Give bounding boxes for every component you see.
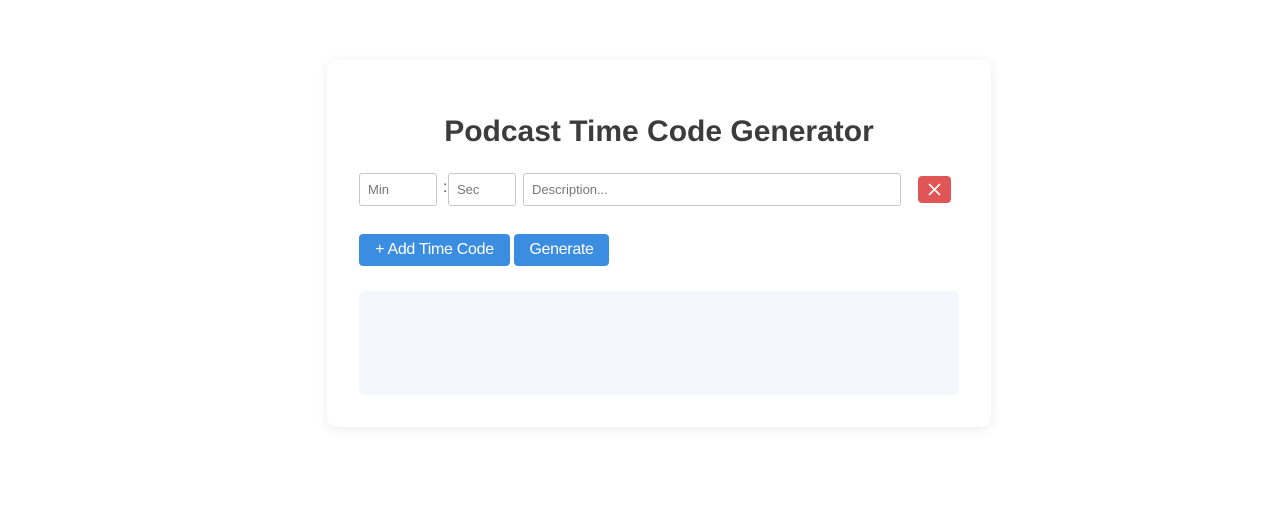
output area (359, 291, 959, 395)
input: minutes: Min (368, 182, 389, 197)
delete button (918, 176, 951, 203)
button: generate (514, 234, 609, 266)
input: description: Description... (532, 182, 608, 197)
colon separator: : (443, 179, 447, 196)
card panel (327, 60, 991, 427)
button: generate: Generate (529, 241, 594, 258)
input: minutes (359, 173, 437, 206)
input: description (523, 173, 901, 206)
button: add time code (359, 234, 510, 266)
button: add time code: + Add Time Code (375, 241, 494, 258)
title: Podcast Time Code Generator (444, 115, 874, 148)
input: seconds: Sec (457, 182, 479, 197)
input: seconds (448, 173, 516, 206)
